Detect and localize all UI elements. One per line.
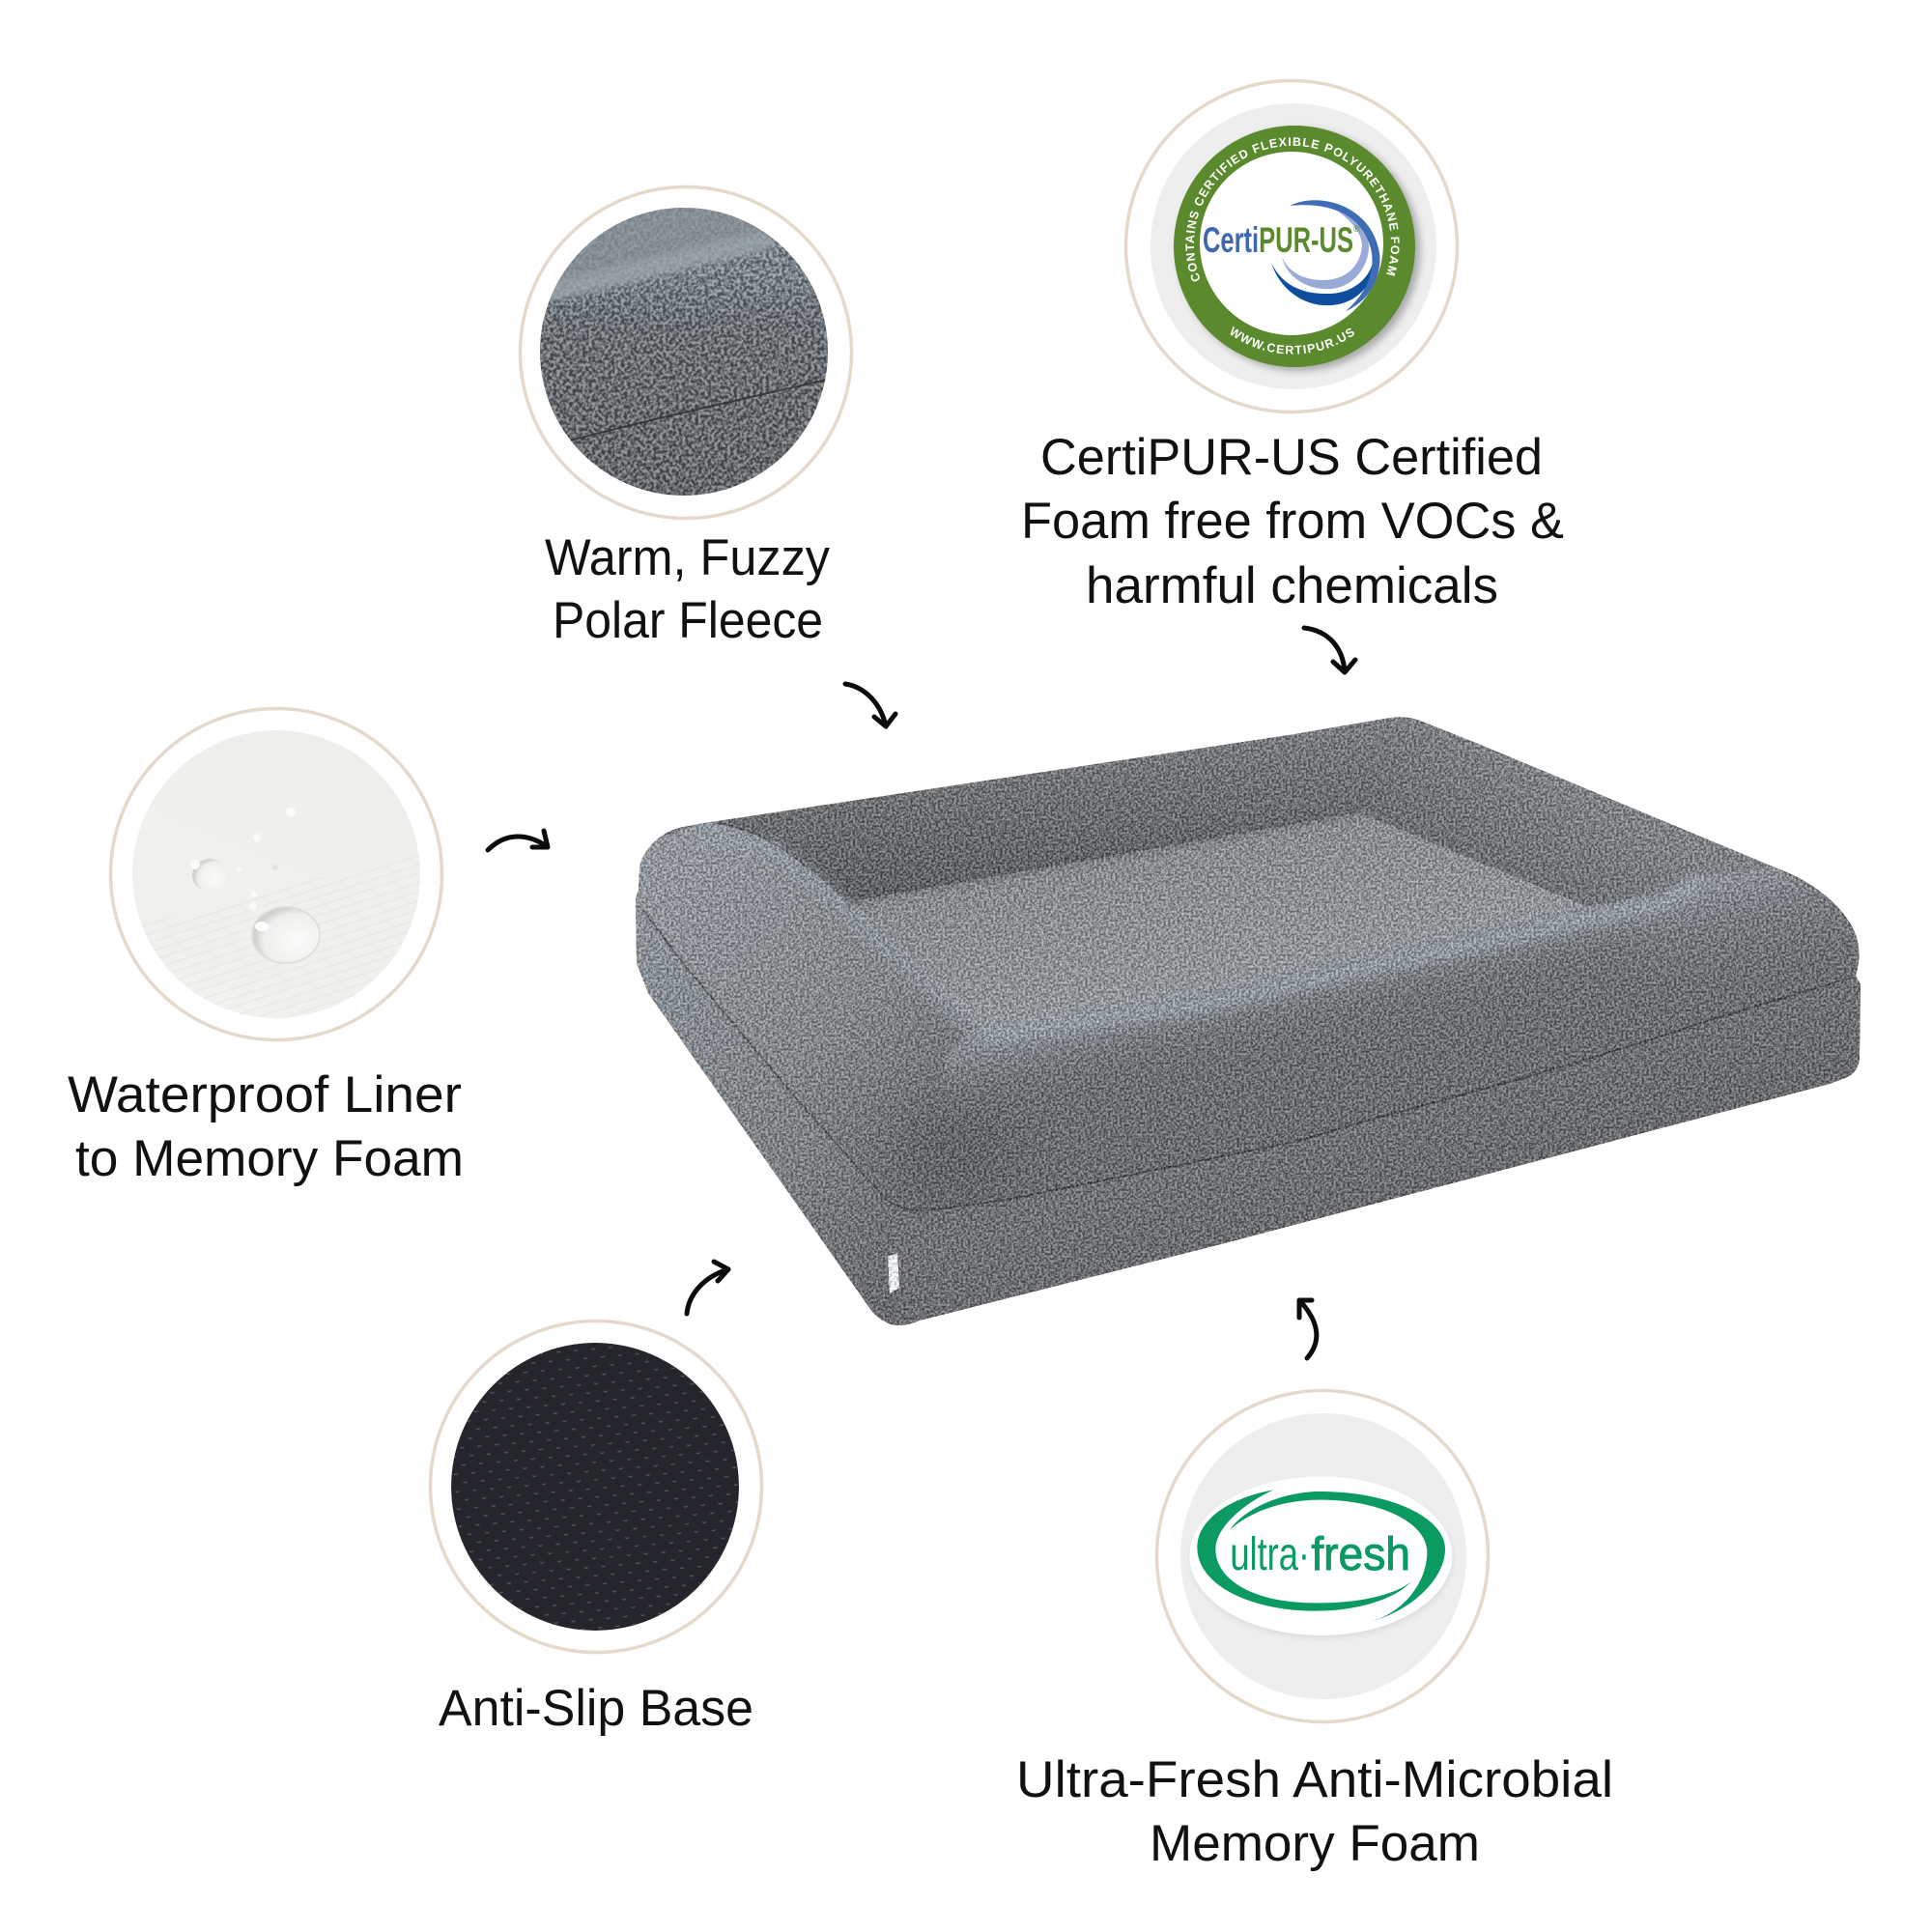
swatch: black dotted base [444, 1333, 753, 1642]
label: certipur [1021, 429, 1564, 614]
seal text: url: WWW.CERTIPUR.US [1231, 327, 1354, 355]
label: ultra-fresh: Memory Foam [1150, 1815, 1480, 1872]
bed base [618, 696, 1874, 1343]
logo wordmark: CertiPUR-US [1203, 220, 1353, 260]
ring: certipur [1126, 81, 1457, 412]
ring: waterproof [110, 709, 442, 1039]
panel: ultra-fresh [1016, 1391, 1613, 1872]
label: ultra-fresh: Ultra-Fresh Anti-Microbial [1016, 1751, 1613, 1808]
label: certipur: CertiPUR-US Certified [1040, 429, 1543, 486]
registered mark: ® [1353, 224, 1360, 234]
back bolster [704, 718, 1383, 902]
label: certipur: Foam free from VOCs & [1021, 493, 1564, 550]
label: certipur: harmful chemicals [1086, 557, 1498, 614]
panel: CertiPUR-US certified foam [1021, 79, 1564, 614]
panel: waterproof liner [68, 709, 464, 1187]
grey disc [1151, 103, 1436, 389]
label: waterproof: to Memory Foam [75, 1130, 464, 1187]
label: ultra-fresh [1016, 1751, 1613, 1872]
arrow: base to bed [687, 1262, 728, 1314]
seams [642, 823, 1851, 1210]
shading [700, 720, 1702, 1198]
panel: warm fuzzy polar fleece [520, 187, 852, 649]
swatch: grey fleece texture [536, 203, 836, 502]
badge: ultra-fresh logo [1189, 1476, 1452, 1637]
right bolster [1383, 715, 1777, 907]
arrow: fleece to bed [845, 684, 895, 726]
badge: CertiPUR-US seal [1174, 126, 1424, 375]
left bolster [628, 821, 976, 1210]
label: waterproof: Waterproof Liner [68, 1066, 462, 1123]
mattress floor [847, 812, 1588, 1029]
front bolster face [869, 868, 1864, 1210]
ring: ultra-fresh [1157, 1391, 1488, 1721]
badge: ultra-fresh logo: ultra· [1230, 1528, 1310, 1580]
care tag [888, 1253, 899, 1293]
swatch: white liner with droplets [132, 730, 425, 1024]
badge: ultra-fresh logo: fresh [1311, 1528, 1410, 1580]
label: fleece: Polar Fleece [553, 592, 823, 649]
ring: fleece [520, 187, 852, 518]
panel: anti-slip base [431, 1321, 761, 1737]
ring: base [431, 1321, 761, 1652]
seal text: top arc: CONTAINS CERTIFIED FLEXIBLE POLYURETHANE FOAM [1185, 137, 1400, 282]
label: fleece: Warm, Fuzzy [545, 529, 830, 586]
label: base: Anti-Slip Base [439, 1680, 753, 1737]
logo swooshes [1271, 200, 1379, 311]
lower front face [886, 974, 1864, 1333]
arrow: waterproof to bed [488, 831, 548, 850]
label: fleece [545, 529, 830, 649]
label: waterproof [68, 1066, 464, 1187]
left side face [628, 894, 913, 1333]
arrow: certipur to bed [1304, 628, 1355, 672]
product: grey bolster dog bed [618, 696, 1874, 1343]
arrow: ultra-fresh to bed [1299, 1300, 1317, 1358]
grey disc [1180, 1413, 1466, 1699]
